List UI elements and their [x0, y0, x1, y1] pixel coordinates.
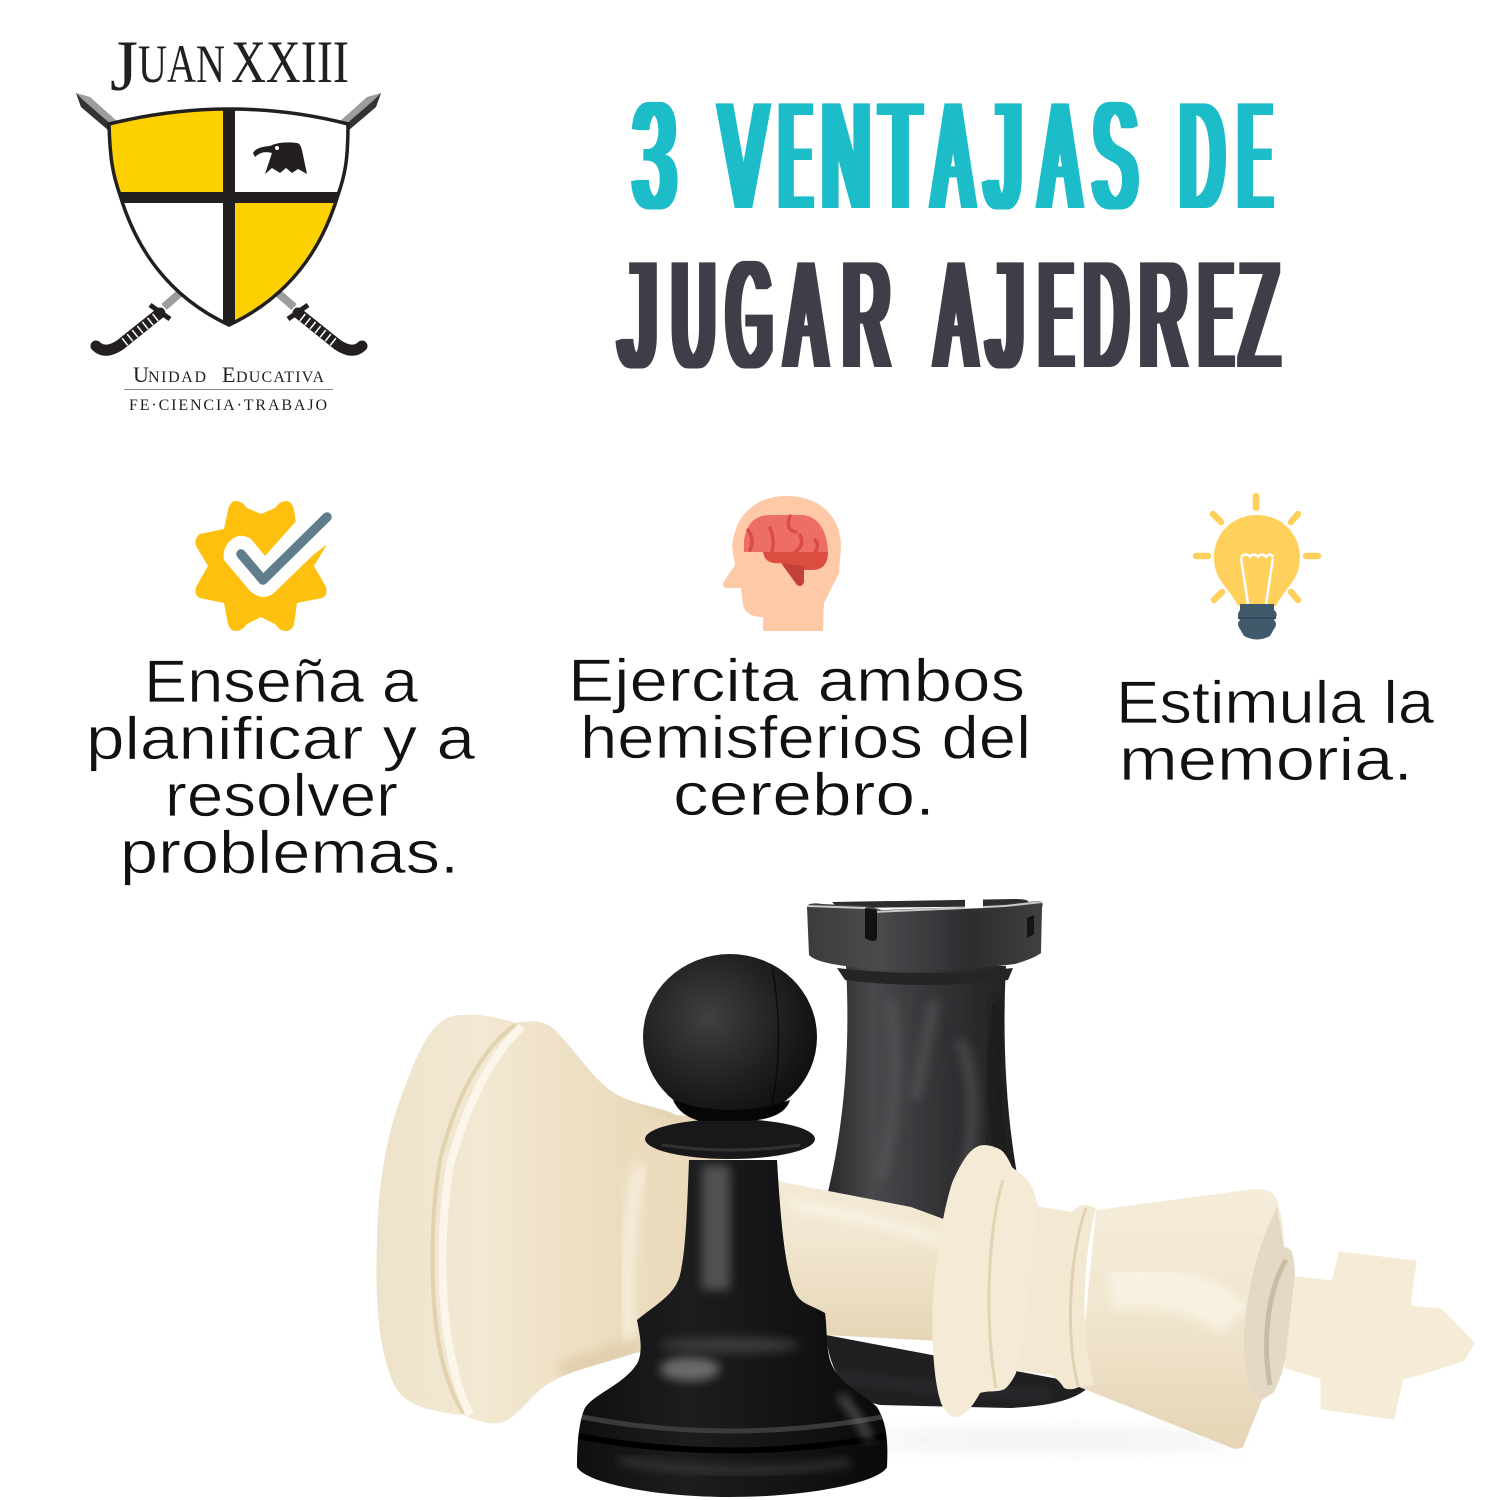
logo wordmark: J	[110, 26, 138, 106]
ground shadow	[860, 1428, 1240, 1452]
king neck and collars	[1016, 1205, 1096, 1389]
title line 2: E	[1040, 230, 1072, 400]
text: benefit 2: hemisferios del	[580, 704, 1031, 771]
logo wordmark: UAN	[138, 34, 225, 94]
king finial ring	[1244, 1207, 1295, 1400]
title line 2: D	[1084, 230, 1127, 400]
logo subtitle: E	[222, 362, 235, 387]
title line 2: G	[728, 230, 772, 400]
logo subtitle: NIDAD	[148, 369, 206, 386]
text: benefit 2	[568, 647, 1031, 828]
text: benefit 3: Estimula la	[1116, 669, 1435, 736]
text: E	[1239, 71, 1271, 241]
icon: light bulb	[1196, 496, 1318, 640]
title line 1: V	[721, 71, 766, 241]
title line 2: A	[937, 230, 975, 400]
text: Z	[1241, 230, 1278, 400]
title line 2: E	[1200, 230, 1232, 400]
king shaft	[720, 1155, 960, 1345]
icon: eagle	[253, 142, 307, 174]
logo motto: FE·CIENCIA·TRABAJO	[129, 397, 327, 414]
logo subtitle: DUCATIVA	[236, 369, 324, 386]
ivory king lying down	[376, 1015, 1473, 1449]
pawn head	[643, 954, 817, 1120]
photo: chess pieces	[376, 899, 1473, 1497]
title line 2: R	[1140, 230, 1187, 400]
text: benefit 1: Enseña a	[144, 648, 419, 715]
icon: badge with check mark	[196, 500, 345, 631]
title line 1: E	[780, 71, 811, 241]
title line 1: S	[1094, 71, 1136, 241]
title line 2: U	[673, 230, 714, 400]
title line 1: A	[934, 71, 972, 241]
logo: Juan XXIII school crest	[76, 26, 381, 414]
title line 2: J	[988, 230, 1024, 400]
title line 1: N	[822, 71, 870, 241]
title line 2: R	[843, 230, 890, 400]
pawn collar	[645, 1119, 815, 1159]
title line 2: A	[787, 230, 825, 400]
crossed swords	[76, 93, 381, 350]
text: benefit 1: problemas.	[120, 819, 459, 886]
text: benefit 1: resolver	[165, 762, 398, 829]
pawn body	[577, 1160, 887, 1497]
icon: head with brain	[723, 496, 841, 631]
shield	[107, 107, 350, 327]
black pawn	[577, 954, 887, 1497]
title line 1: A	[1041, 71, 1079, 241]
text: benefit 3: memoria.	[1119, 726, 1413, 793]
king cross	[1286, 1253, 1473, 1418]
black rook	[807, 899, 1090, 1408]
text: benefit 2: Ejercita ambos	[568, 647, 1025, 714]
title	[620, 71, 1278, 400]
text: benefit 1: planificar y a	[86, 705, 476, 772]
title line 2: J	[620, 230, 657, 400]
king crown	[1079, 1189, 1284, 1449]
logo subtitle: U	[133, 362, 149, 387]
title line 1: J	[986, 71, 1022, 241]
text: benefit 3	[1116, 669, 1435, 793]
logo wordmark: XXIII	[231, 29, 349, 95]
title line 1: D	[1180, 71, 1223, 241]
title line 1: 3	[634, 71, 675, 241]
text: benefit 1	[86, 648, 476, 886]
title line 1: T	[881, 71, 920, 241]
king base	[376, 1015, 720, 1423]
text: benefit 2: cerebro.	[673, 761, 935, 828]
